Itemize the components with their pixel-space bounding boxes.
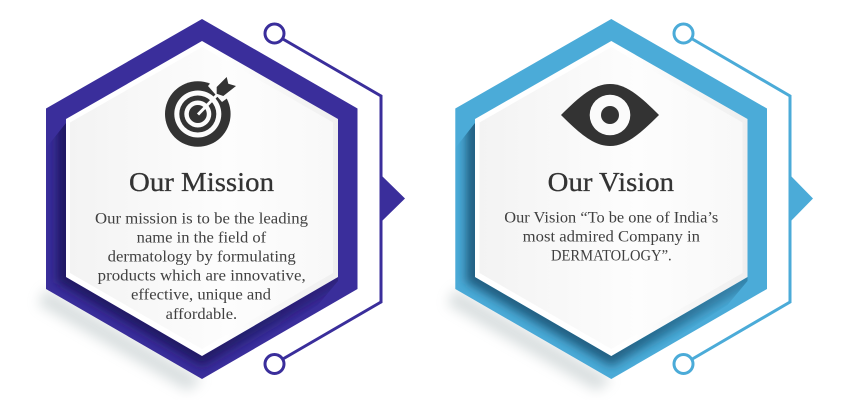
text block: mission statement: affordable. <box>166 306 237 323</box>
icon: target with arrow <box>165 77 236 147</box>
text block: mission statement <box>95 210 308 323</box>
text block: mission statement: products which are innovative, <box>98 267 306 284</box>
heading: Our Mission: Our Mission <box>129 167 275 197</box>
drop shadow: vision hexagon <box>447 289 611 391</box>
connector line: mission <box>265 24 381 374</box>
arrow tab: vision <box>790 175 813 222</box>
connector line: vision <box>674 24 790 374</box>
outer hexagon: mission <box>46 19 358 379</box>
text block: mission statement: name in the field of <box>137 229 267 246</box>
icon: eye <box>561 84 659 146</box>
inner hexagon: vision <box>475 41 748 356</box>
drop shadow: mission hexagon <box>38 289 202 391</box>
text block: vision statement: most admired Company in <box>523 228 700 245</box>
arrow tab: mission <box>381 175 405 222</box>
inner shading: mission <box>66 110 345 356</box>
heading: Our Vision: Our Vision <box>548 167 675 197</box>
inner shading: vision <box>475 110 754 356</box>
text block: mission statement: dermatology by formulating <box>108 248 296 265</box>
inner hexagon: mission <box>66 41 338 356</box>
text block: mission statement: effective, unique and <box>131 286 271 303</box>
text block: vision statement <box>504 209 718 264</box>
text block: vision statement: DERMATOLOGY”. <box>551 247 672 264</box>
text block: vision statement: Our Vision “To be one of India’s <box>504 209 718 226</box>
text block: mission statement: Our mission is to be the leading <box>95 210 308 227</box>
panel: vision <box>447 19 813 391</box>
outer hexagon: vision <box>455 19 767 379</box>
panel: mission <box>38 19 405 391</box>
